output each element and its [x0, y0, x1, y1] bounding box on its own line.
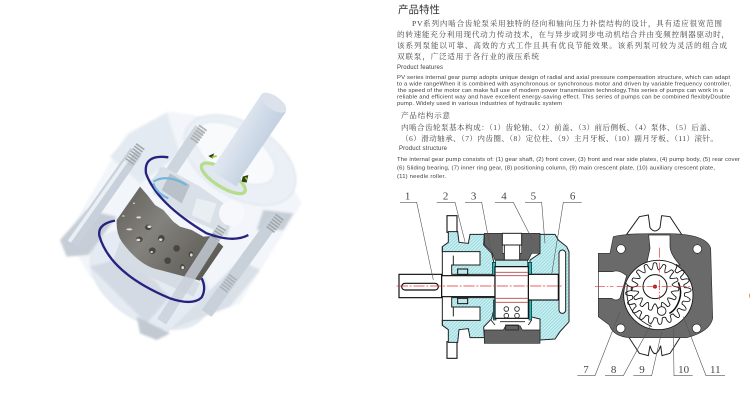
centre tie rod over cylinder — [162, 232, 219, 322]
gear detail — [491, 272, 532, 330]
illustration: transparent cutaway pump — [60, 89, 312, 350]
part numbers 7-11: 8 — [611, 364, 617, 376]
positioning column — [657, 307, 666, 315]
paragraph: chinese structure list — [401, 122, 718, 143]
front cover cavity outline — [442, 247, 453, 325]
red centre lines — [595, 248, 692, 300]
light blue seal — [153, 178, 187, 198]
part numbers 7-11 — [583, 364, 721, 376]
part numbers 1-6: 2 — [443, 190, 448, 202]
centre line — [397, 285, 563, 287]
part numbers 1-6: 3 — [471, 190, 477, 202]
paragraph: english structure list: The internal gear pump consists of: (1) gear shaft, (2) front cover, (3) front and rear side plates, (4) pump body, (5) rear cover — [397, 157, 740, 163]
paragraph: english description — [397, 75, 731, 107]
paragraph: english structure list: (11) needle roller. — [397, 174, 446, 180]
blue O-rings — [99, 157, 248, 302]
white flange lugs — [447, 216, 457, 358]
pinion gear — [631, 263, 679, 311]
paragraph: english description: to a wide rangeWhen it is combined with asynchronous or synchronous motor and driven by variable frequency controller, — [397, 82, 731, 88]
paragraph: english structure list: (6) Sliding bearing, (7) inner ring gear, (8) positioning column, (9) main crescent plate, (10) auxiliary crescent plate, — [397, 166, 715, 172]
leader lines 7-11 — [577, 312, 725, 376]
paragraph: chinese structure list: （6）滑动轴承、（7）内齿圈、（8）定位柱、（9）主月牙板、（10）副月牙板、（11）滚针。 — [401, 133, 718, 143]
part numbers 7-11: 10 — [678, 364, 690, 376]
part numbers 1-6: 1 — [405, 190, 410, 202]
thread of centre rod — [214, 227, 222, 240]
pump housing — [60, 96, 312, 350]
mounting lugs — [627, 215, 682, 356]
part numbers 7-11: 11 — [710, 364, 721, 376]
shaft seals — [458, 269, 468, 304]
tie rods — [69, 127, 280, 313]
crescent plate — [669, 282, 681, 313]
paragraph: english structure list — [397, 157, 740, 180]
heading: product structure cn: 产品结构示意 — [401, 110, 450, 120]
leader lines 1-6 — [400, 202, 582, 280]
paragraph: chinese description: 的转速能充分利用现代动力传动技术，在与异步或同步电动机结合并由变频控制器驱动时， — [397, 29, 729, 40]
paragraph: chinese description: 双联泵，广泛适用于各行业的液压系统 — [397, 51, 539, 62]
heading: product features cn: 产品特性 — [398, 3, 440, 16]
diagram: pump end section — [577, 215, 750, 376]
paragraph: chinese description: 该系列泵能以可靠、高效的方式工作且具有优良节能效果。该系列泵可较为灵活的组合成 — [397, 40, 727, 50]
grey bearing cylinder — [117, 187, 223, 281]
heading: product features en: Product features — [397, 65, 443, 71]
paragraph: chinese structure list: 内啮合齿轮泵基本构成：（1）齿轮轴、（2）前盖、（3）前后侧板、（4）泵体、（5）后盖、 — [401, 122, 715, 132]
ring gear inner wall — [627, 285, 652, 327]
drive shaft — [210, 89, 290, 187]
paragraph: english description: PV series internal gear pump adopts unique design of radial and axial pressure compensation structure, which can adapt — [397, 75, 730, 81]
side plates — [492, 260, 532, 320]
oil ports and bolt holes — [598, 235, 702, 333]
ring gear teeth — [625, 264, 691, 325]
heading: product structure en: Product structure — [399, 146, 448, 152]
part numbers 1-6: 4 — [501, 190, 507, 202]
front and rear covers — [442, 232, 569, 342]
rear cover oil slot — [559, 250, 566, 313]
edge mark — [749, 294, 750, 298]
paragraph: english description: pump. Widely used in various industries of hydraulic system — [397, 101, 562, 107]
gear chamber — [624, 260, 693, 330]
part numbers 1-6: 6 — [570, 190, 576, 202]
inner gear parts — [113, 167, 244, 297]
part numbers 7-11: 7 — [583, 364, 589, 376]
part numbers 1-6 — [405, 190, 576, 202]
part numbers 1-6: 5 — [531, 190, 537, 202]
paragraph: english description: reliable and efficient way and have excellent energy-saving effect. This series of pumps can be combined flexiblyDouble — [397, 94, 731, 100]
pump body — [484, 233, 540, 343]
pump housing — [598, 234, 713, 338]
paragraph: chinese description: PV系列内啮合齿轮泵采用独特的径向和轴向压力补偿结构的设计，具有适应很宽范围 — [412, 18, 722, 29]
body oil port — [502, 233, 522, 260]
paragraph: chinese description — [397, 18, 729, 62]
drive shaft — [399, 267, 558, 318]
diagram: pump cross section — [397, 190, 582, 358]
green seal ring — [197, 153, 249, 199]
paragraph: english description: the speed of the motor can make full use of modern power transmission technology.This series of pumps can work in a — [398, 88, 724, 94]
text block: product features — [397, 3, 740, 180]
part numbers 7-11: 9 — [639, 364, 645, 376]
